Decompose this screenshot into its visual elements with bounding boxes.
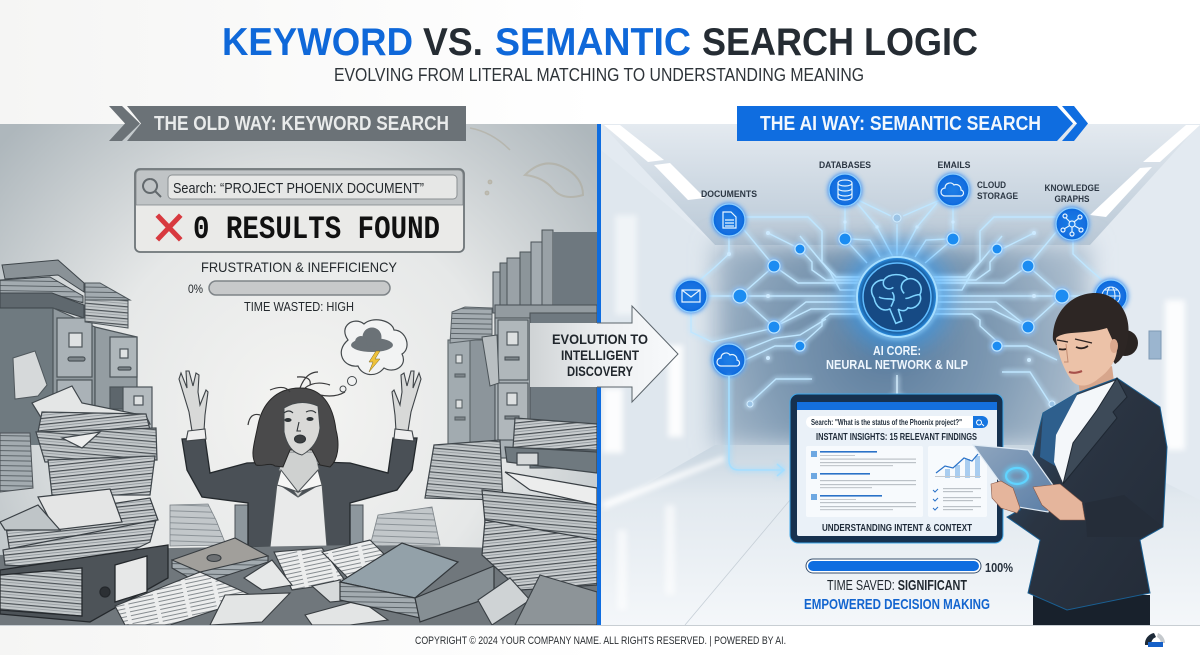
coffee stains (470, 128, 583, 197)
failed search box (135, 169, 464, 252)
chair (235, 505, 363, 547)
progress bar full (806, 559, 981, 573)
ceiling light strips (604, 125, 1200, 217)
hollow and light dots (727, 214, 1055, 407)
copyright: COPYRIGHT © 2024 YOUR COMPANY NAME. ALL RIGHTS RESERVED. | POWERED BY AI. (415, 635, 786, 647)
chevron (109, 106, 140, 141)
label: AI core: AI CORE: (873, 343, 921, 358)
arrow: evolution to intelligent discovery (530, 306, 678, 402)
facial features (284, 411, 316, 443)
label: documents: DOCUMENTS (701, 189, 757, 200)
circuit traces left half (691, 217, 870, 403)
cloud icon (717, 353, 740, 366)
title: KEYWORD (222, 21, 413, 64)
label: emails: EMAILS (938, 160, 970, 171)
banner: the AI way (737, 106, 1088, 141)
logo (1145, 633, 1165, 647)
label: cloud storage: STORAGE (977, 191, 1018, 202)
envelope icon (682, 290, 700, 302)
arrow: core to results (891, 375, 903, 402)
brain icon (872, 275, 921, 323)
ear (1110, 339, 1118, 353)
hands and cuffs (179, 371, 421, 441)
label: knowledge graphs: KNOWLEDGE (1044, 183, 1100, 194)
magnifier icon (143, 179, 161, 197)
search query text: Search: “PROJECT PHOENIX DOCUMENT” (173, 180, 424, 197)
big dark folder (553, 232, 597, 305)
time saved text: TIME SAVED: SIGNIFICANT (827, 577, 967, 594)
tablet held (973, 445, 1055, 512)
results list card (806, 446, 923, 517)
red cross icon (159, 217, 179, 238)
upper left stack (32, 386, 157, 495)
left cabinet one (53, 308, 95, 410)
small junction nodes (733, 233, 1069, 351)
source node: cloud storage (937, 174, 969, 206)
source node: databases (829, 174, 861, 206)
banner: the AI way: THE AI WAY: SEMANTIC SEARCH (760, 113, 1041, 135)
source node: knowledge graphs (1056, 208, 1088, 240)
centre blue divider (597, 124, 601, 625)
neck (1078, 366, 1114, 408)
label: AI core: NEURAL NETWORK & NLP (826, 357, 968, 372)
left right-side cabinet (448, 340, 495, 445)
right foreground papers (478, 575, 597, 625)
bottom document (115, 572, 388, 625)
right lapel (1063, 378, 1127, 484)
binders on left cabinet (0, 260, 84, 318)
search field (806, 416, 988, 428)
graph icon (1061, 214, 1083, 236)
source node: cloud (713, 344, 745, 376)
document icon (723, 212, 736, 228)
chart and checklist card (928, 446, 987, 517)
empowered decision making: EMPOWERED DECISION MAKING (804, 596, 990, 613)
frustration label: FRUSTRATION & INEFFICIENCY (201, 259, 398, 275)
label: databases: DATABASES (819, 160, 871, 171)
browser bar (797, 402, 997, 410)
arrow: cloud to results (729, 376, 784, 476)
corridor base (601, 124, 1200, 625)
insights heading: INSTANT INSIGHTS: 15 RELEVANT FINDINGS (816, 432, 977, 443)
circuit traces right half (932, 217, 1102, 403)
arrow label: INTELLIGENT (561, 348, 640, 363)
arrow label: EVOLUTION TO (552, 332, 648, 347)
results tablet (790, 394, 1003, 543)
dark wall left with big cabinet side (0, 308, 52, 445)
suit jacket (1007, 378, 1167, 610)
hair (253, 388, 338, 467)
panel: old way keyword search scene (0, 124, 597, 625)
wall panels lit (603, 215, 1185, 453)
label: cloud storage: CLOUD (977, 180, 1006, 191)
facial features (1057, 339, 1092, 373)
title: SEARCH LOGIC (702, 21, 978, 64)
database icon (838, 180, 852, 200)
shirt (1054, 380, 1117, 483)
banner: the old way: THE OLD WAY: KEYWORD SEARCH (154, 113, 449, 135)
zero results: 0 RESULTS FOUND (193, 211, 440, 248)
floor seam (685, 500, 790, 625)
corridor ceiling (601, 124, 1200, 245)
folder inserted in cabinet (482, 335, 499, 386)
title: VS. (423, 21, 483, 64)
face (284, 402, 320, 455)
arrow label: DISCOVERY (567, 364, 633, 379)
jacket and raised arms (182, 438, 417, 547)
cloud icon (941, 183, 964, 196)
papers on cabinet two (85, 283, 130, 328)
corridor right wall (1090, 150, 1200, 500)
grey folder right (340, 543, 494, 622)
corridor left wall (601, 150, 715, 510)
far left paper stack (0, 433, 33, 492)
businesswoman with tablet (973, 293, 1167, 625)
AI core brain (843, 243, 951, 351)
hair back and bun (1112, 330, 1138, 356)
central grey folder (172, 538, 268, 584)
label: knowledge graphs: GRAPHS (1054, 194, 1090, 205)
jacket lower arm cuff (1085, 495, 1163, 537)
search glass icon (977, 420, 984, 426)
circuit traces top (845, 200, 953, 263)
paper background (0, 124, 597, 555)
tablet screen (797, 402, 997, 536)
pinned note (13, 351, 47, 399)
distant paper piles (170, 504, 440, 546)
search query: Search: "What is the status of the Phoenix project?" (811, 417, 962, 427)
face (1056, 328, 1117, 386)
corridor back wall (715, 243, 1090, 448)
right binders on cabinet (493, 230, 553, 313)
time wasted: TIME WASTED: HIGH (244, 300, 354, 314)
title (222, 21, 978, 64)
arrow outline (597, 306, 678, 402)
shirt collar (277, 470, 322, 492)
thought bubble with storm (340, 320, 407, 392)
shirt (270, 483, 327, 547)
left cabinet two (95, 327, 152, 430)
banner: the old way (109, 106, 466, 141)
footer (0, 626, 1165, 655)
intent and context caption: UNDERSTANDING INTENT & CONTEXT (822, 523, 972, 534)
old-way paper top strip (0, 0, 600, 124)
right front stack (482, 472, 597, 590)
title: SEMANTIC (495, 21, 691, 64)
panel: AI way semantic search scene (601, 124, 1200, 625)
big right cabinet (495, 305, 597, 468)
footer divider (0, 625, 1200, 626)
progress value 0%: 0% (188, 282, 203, 296)
neck (279, 452, 319, 497)
source node: email (675, 280, 707, 312)
search button (973, 416, 988, 428)
chevron (1062, 106, 1088, 141)
wall note (1149, 331, 1161, 359)
globe icon (1102, 287, 1120, 305)
source node: web (1095, 280, 1127, 312)
upper right stacks (425, 418, 597, 500)
search bar strip (136, 170, 463, 205)
lightning bolt (369, 351, 380, 372)
left ring binder (0, 545, 168, 622)
storm cloud (351, 338, 393, 352)
subtitle: EVOLVING FROM LITERAL MATCHING TO UNDERSTANDING MEANING (334, 65, 864, 85)
front left stack (0, 489, 158, 570)
open documents (244, 540, 386, 602)
floor (601, 445, 1200, 625)
desk (0, 545, 597, 625)
papers atop right-side cabinet (450, 307, 492, 343)
trousers (1033, 595, 1150, 625)
seated woman frustrated (179, 371, 421, 547)
progress value 100%: 100% (985, 560, 1013, 575)
left lapel (1040, 393, 1077, 467)
search input (168, 175, 457, 199)
progress bar empty (209, 281, 390, 295)
hair wisps (248, 372, 345, 425)
source node: documents (713, 204, 745, 236)
floor light strip and reflections (603, 456, 725, 610)
hands (991, 481, 1085, 520)
